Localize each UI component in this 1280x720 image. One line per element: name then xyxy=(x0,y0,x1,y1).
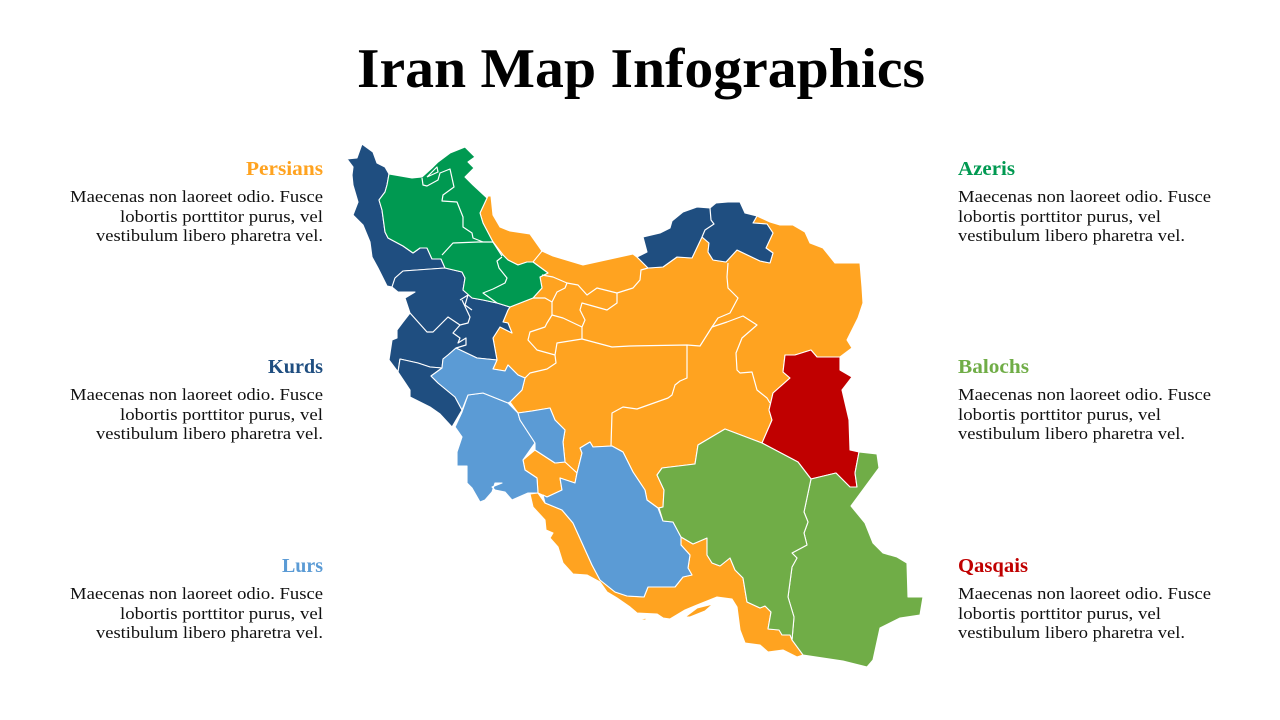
text block: Balochs: Maecenas non laoreet odio. Fusce xyxy=(958,385,1211,404)
panel: Qasqais xyxy=(958,555,1211,642)
heading: Lurs: Lurs xyxy=(282,555,323,577)
region: Kurds xyxy=(347,144,773,427)
text block: Lurs xyxy=(70,584,323,642)
text block: Balochs: lobortis porttitor purus, vel xyxy=(958,405,1161,424)
text block: Lurs: vestibulum libero pharetra vel. xyxy=(96,623,323,642)
text block: Azeris: Maecenas non laoreet odio. Fusce xyxy=(958,187,1211,206)
text block: Qasqais: Maecenas non laoreet odio. Fusce xyxy=(958,584,1211,603)
region: Persians xyxy=(480,196,863,657)
panel: Lurs xyxy=(70,555,323,642)
region: Azeris xyxy=(379,147,548,307)
text block: Qasqais: vestibulum libero pharetra vel. xyxy=(958,623,1185,642)
text block: Persians: Maecenas non laoreet odio. Fusce xyxy=(70,187,323,206)
text block: Azeris xyxy=(958,187,1211,245)
text block: Lurs: Maecenas non laoreet odio. Fusce xyxy=(70,584,323,603)
text block: Kurds: lobortis porttitor purus, vel xyxy=(120,405,323,424)
panel: Azeris xyxy=(958,158,1211,245)
title: Iran Map Infographics xyxy=(357,38,925,100)
heading: Kurds: Kurds xyxy=(268,356,323,378)
panel: Balochs xyxy=(958,356,1211,443)
text block: Kurds: Maecenas non laoreet odio. Fusce xyxy=(70,385,323,404)
text block: Persians xyxy=(70,187,323,245)
panel: Persians xyxy=(70,158,323,245)
text block: Persians: vestibulum libero pharetra vel. xyxy=(96,226,323,245)
text block: Balochs xyxy=(958,385,1211,443)
text block: Azeris: lobortis porttitor purus, vel xyxy=(958,207,1161,226)
panel: Kurds xyxy=(70,356,323,443)
text block: Kurds xyxy=(70,385,323,443)
map of Iran xyxy=(347,144,923,667)
heading: Azeris: Azeris xyxy=(958,158,1015,180)
text block: Qasqais: lobortis porttitor purus, vel xyxy=(958,604,1161,623)
text block: Qasqais xyxy=(958,584,1211,642)
text block: Kurds: vestibulum libero pharetra vel. xyxy=(96,424,323,443)
region: Qasqais xyxy=(762,350,859,487)
region: Lurs xyxy=(431,348,692,597)
region: Balochs xyxy=(657,429,923,667)
text block: Lurs: lobortis porttitor purus, vel xyxy=(120,604,323,623)
province borders xyxy=(422,169,483,242)
heading: Persians: Persians xyxy=(246,158,323,180)
heading: Balochs: Balochs xyxy=(958,356,1029,378)
text block: Balochs: vestibulum libero pharetra vel. xyxy=(958,424,1185,443)
heading: Qasqais: Qasqais xyxy=(958,555,1028,577)
text block: Azeris: vestibulum libero pharetra vel. xyxy=(958,226,1185,245)
text block: Persians: lobortis porttitor purus, vel xyxy=(120,207,323,226)
